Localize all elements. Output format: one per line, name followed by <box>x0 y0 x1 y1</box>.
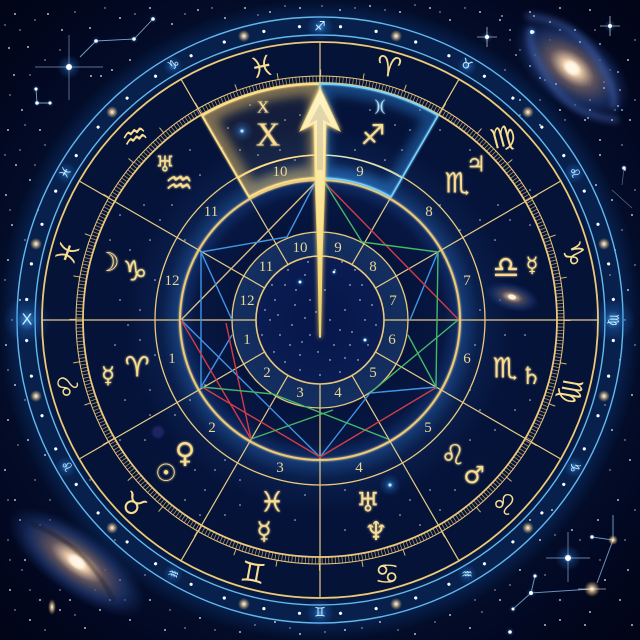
outer house numbers: 2 <box>208 420 216 436</box>
inner signs and planets <box>96 98 542 547</box>
outer house numbers: 4 <box>355 460 363 476</box>
outer house numbers: 1 <box>168 351 176 367</box>
outer band glyphs: ♑︎ <box>165 56 183 74</box>
inner signs and planets: ☿︎ <box>101 363 115 389</box>
outer band glyphs: ♊︎ <box>314 606 326 620</box>
inner signs and planets: ☉︎ <box>155 459 177 487</box>
outer zodiac signs: ♑︎ <box>554 237 594 271</box>
inner signs and planets: ♈︎ <box>124 350 150 384</box>
outer band glyphs: ♐︎ <box>314 20 326 34</box>
inner signs and planets: ♐︎ <box>360 118 386 152</box>
inner signs and planets: ♓︎ <box>259 486 285 518</box>
inner house numbers: 5 <box>369 365 377 381</box>
inner signs and planets: ♀︎ <box>175 436 195 470</box>
outer house numbers: 6 <box>463 351 471 367</box>
outer house numbers: 3 <box>276 460 284 476</box>
outer house numbers: 5 <box>424 420 432 436</box>
inner signs and planets: ♒︎ <box>165 164 193 202</box>
inner house numbers <box>240 240 397 401</box>
outer house numbers: 8 <box>425 204 433 220</box>
outer band glyphs: ♉︎ <box>457 56 475 74</box>
outer zodiac signs: ♍︎ <box>487 118 519 156</box>
outer house numbers: 9 <box>356 164 364 180</box>
outer band glyphs: ♌︎ <box>565 164 583 182</box>
outer house numbers: 7 <box>463 273 471 289</box>
bright star: top left <box>35 35 103 100</box>
inner house numbers: 7 <box>389 293 397 309</box>
inner signs and planets: ♏︎ <box>444 166 470 200</box>
bright stars: top right <box>477 16 632 208</box>
outer band glyphs: ♑︎ <box>565 459 583 475</box>
inner signs and planets: ♂︎ <box>463 461 485 489</box>
small galaxy: bottom left satellite <box>48 599 56 615</box>
inner house numbers: 10 <box>292 240 308 256</box>
outer zodiac signs: ♌︎ <box>47 369 87 405</box>
inner signs and planets: )( <box>375 98 385 114</box>
highlighted sector band arc <box>238 155 402 178</box>
outer band glyphs: X <box>22 312 33 328</box>
outer house numbers <box>164 164 471 476</box>
constellation: top left <box>32 14 158 107</box>
inner house numbers: 12 <box>240 293 254 309</box>
highlighted sector: left gold <box>202 84 320 197</box>
inner house numbers: 6 <box>388 332 396 348</box>
inner house numbers: 8 <box>369 259 377 275</box>
inner signs and planets: X <box>256 116 280 154</box>
inner signs and planets: ♑︎ <box>122 254 148 288</box>
inner signs and planets: ♅︎ <box>356 488 380 518</box>
outer zodiac signs: ♊︎ <box>238 555 268 591</box>
inner house numbers: 4 <box>334 385 342 401</box>
degree scale <box>73 73 567 567</box>
outer band glyphs: ♒︎ <box>165 566 181 584</box>
arrow: midheaven pointer <box>300 88 340 337</box>
outer house numbers: 10 <box>272 164 288 180</box>
outer band glyphs: ♍︎ <box>606 314 620 326</box>
inner house numbers: 2 <box>263 365 271 381</box>
inner signs and planets: ♎︎ <box>493 250 519 286</box>
inner signs and planets: ♄︎ <box>520 362 542 390</box>
inner signs and planets: ☽︎ <box>96 248 120 278</box>
outer zodiac signs: ♌︎ <box>487 484 521 524</box>
inner signs and planets: ♆︎ <box>364 517 388 547</box>
outer zodiac signs: ♍︎ <box>553 376 589 406</box>
outer band glyphs: ♓︎ <box>57 164 75 182</box>
inner signs and planets: ♃︎ <box>466 152 486 178</box>
outer zodiac signs: ♉︎ <box>113 484 153 526</box>
highlighted sector: right blue <box>320 84 438 197</box>
inner signs and planets: ☿︎ <box>256 516 272 546</box>
outer zodiac signs: ♈︎ <box>374 49 404 85</box>
house spokes <box>42 42 598 598</box>
blue aspect lines <box>181 183 438 457</box>
galaxy: top right <box>495 0 640 140</box>
nebula spots <box>152 120 401 496</box>
galaxy: bottom left <box>0 488 162 636</box>
inner signs and planets: ♏︎ <box>492 352 518 384</box>
outer zodiac signs: ♒︎ <box>116 116 154 158</box>
outer zodiac signs: ♓︎ <box>48 236 88 270</box>
outer house numbers: 11 <box>204 204 218 220</box>
gold rings <box>42 42 598 598</box>
inner house numbers: 11 <box>259 259 273 275</box>
inner signs and planets: X <box>257 98 269 116</box>
outer zodiac signs: ♓︎ <box>246 48 278 86</box>
inner house numbers: 9 <box>334 240 342 256</box>
inner signs and planets: ♌︎ <box>440 438 466 472</box>
outer zodiac signs: ♋︎ <box>374 558 400 590</box>
galaxy specks: top right <box>502 16 622 118</box>
inner signs and planets: ☿︎ <box>526 253 538 277</box>
inner house numbers: 3 <box>296 385 304 401</box>
small galaxy inside the chart <box>481 276 543 318</box>
aspect lines <box>181 183 458 457</box>
outer zodiac signs <box>47 48 594 591</box>
outer band glyphs: ♒︎ <box>461 568 473 582</box>
inner house numbers: 1 <box>243 332 251 348</box>
inner signs and planets: ♅︎ <box>155 152 175 178</box>
constellation: bottom right <box>506 515 618 636</box>
outer band glyphs: ♌︎ <box>57 458 75 476</box>
red aspect lines <box>181 183 458 457</box>
green aspect lines <box>202 183 458 439</box>
tan aspect line <box>181 183 315 320</box>
outer house numbers: 12 <box>164 273 180 289</box>
